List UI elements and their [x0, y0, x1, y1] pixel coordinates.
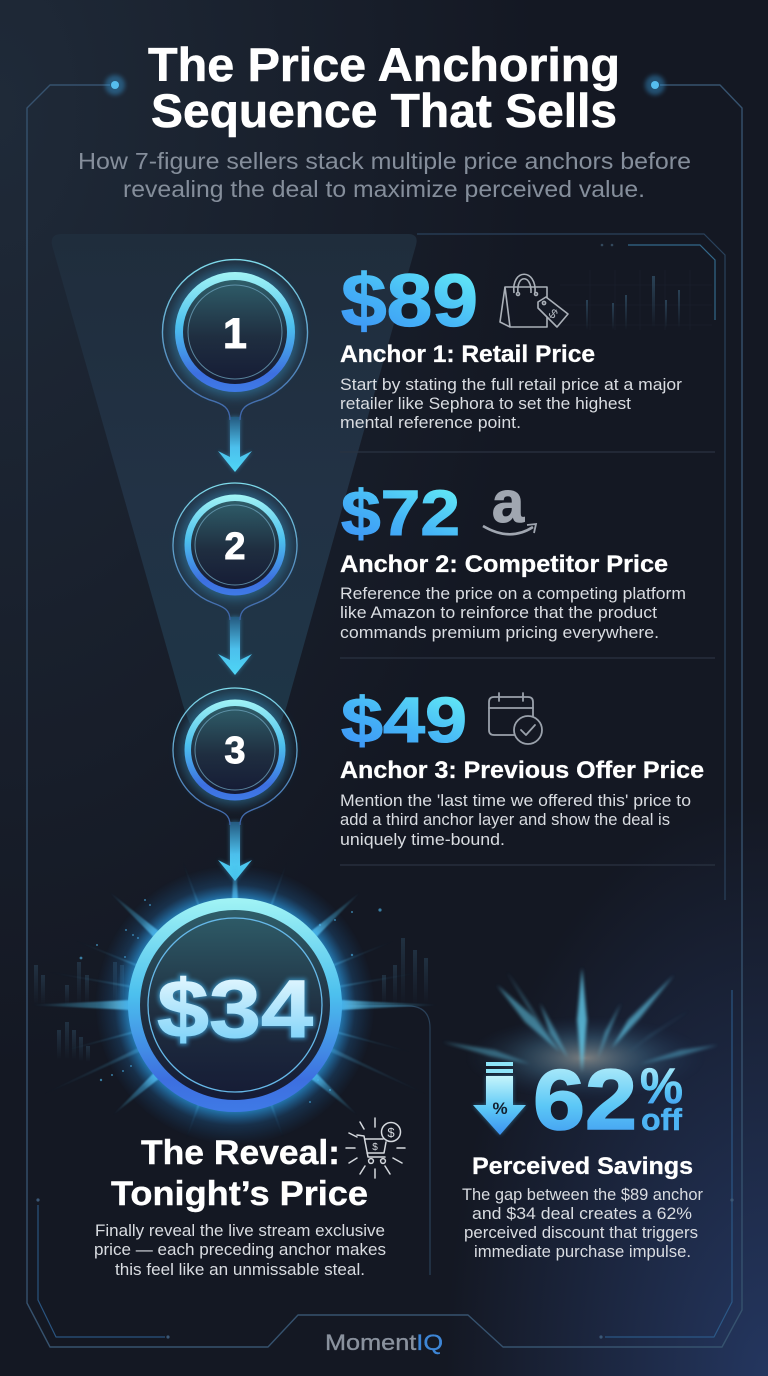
heading	[111, 1134, 368, 1213]
discount 62: 62	[533, 1053, 637, 1148]
reveal block	[94, 1118, 405, 1279]
description: Start by stating the full retail price at a major	[340, 376, 683, 394]
logo: Moment IQ	[325, 1330, 443, 1355]
funnel backdrop	[52, 234, 417, 760]
connector line	[345, 1006, 430, 1275]
reveal price circle	[95, 865, 375, 1145]
description: mental reference point.	[340, 414, 521, 432]
description: Reference the price on a competing platform	[340, 585, 686, 603]
title: Sequence That Sells	[151, 84, 617, 137]
subtitle: How 7-figure sellers stack multiple price anchors before	[78, 148, 691, 174]
arrow 2 to 3	[218, 617, 252, 675]
step 2 node	[173, 483, 297, 620]
description: perceived discount that triggers	[464, 1224, 698, 1242]
description: Finally reveal the live stream exclusive	[95, 1222, 385, 1240]
description: immediate purchase impulse.	[474, 1243, 691, 1261]
icon: cart with coin: $	[372, 1142, 378, 1153]
description: price — each preceding anchor makes	[94, 1241, 386, 1259]
subtitle	[78, 148, 691, 202]
anchor 3 block	[340, 684, 704, 849]
icon: down arrow with percent	[473, 1062, 526, 1135]
description	[340, 792, 691, 849]
heading: Anchor 3: Previous Offer Price	[340, 757, 704, 784]
title: The Price Anchoring	[148, 38, 620, 91]
description: The gap between the $89 anchor	[462, 1186, 703, 1204]
icon: shopping bag with tag: $	[546, 306, 561, 322]
step 3 node	[173, 688, 297, 825]
step 1 node	[163, 260, 308, 420]
description: add a third anchor layer and show the deal is	[340, 811, 670, 829]
price 49: $49	[341, 684, 467, 756]
description	[340, 585, 686, 642]
icon: down arrow with percent: %	[492, 1099, 508, 1118]
off label: off	[641, 1102, 683, 1137]
panel outline with faint chart	[417, 234, 725, 900]
heading: Perceived Savings	[472, 1153, 693, 1180]
icon: amazon a with smile: a	[492, 470, 525, 535]
anchor 2 block	[340, 470, 686, 642]
step 1 node: 1	[223, 310, 247, 358]
description: like Amazon to reinforce that the product	[340, 604, 657, 622]
icon: amazon a with smile	[483, 470, 536, 535]
description	[94, 1222, 386, 1279]
heading: Anchor 1: Retail Price	[340, 341, 595, 368]
description: commands premium pricing everywhere.	[340, 624, 659, 642]
description: Mention the 'last time we offered this' price to	[340, 792, 691, 810]
icon: shopping bag with tag	[500, 274, 568, 327]
description	[462, 1186, 703, 1261]
savings burst	[443, 968, 718, 1100]
arrow 1 to 2	[218, 417, 252, 472]
description	[340, 376, 683, 432]
reveal burst rays	[30, 845, 440, 1142]
heading: Anchor 2: Competitor Price	[340, 551, 668, 578]
arrow 3 to reveal	[218, 822, 252, 881]
reveal price circle: $34	[157, 964, 313, 1055]
anchor 1 block	[340, 259, 683, 432]
step 2 node: 2	[224, 526, 246, 568]
step 3 node: 3	[224, 730, 246, 772]
icon: cart with coin: $	[387, 1125, 395, 1140]
description: and $34 deal creates a 62%	[472, 1205, 692, 1223]
description: uniquely time-bound.	[340, 831, 505, 849]
description: this feel like an unmissable steal.	[115, 1261, 365, 1279]
heading: Tonight’s Price	[111, 1175, 368, 1213]
savings block	[462, 1053, 703, 1261]
title	[148, 38, 620, 137]
subtitle: revealing the deal to maximize perceived value.	[123, 176, 645, 202]
icon: cart with coin	[346, 1118, 405, 1178]
reveal price circle: $34	[157, 964, 313, 1055]
description: retailer like Sephora to set the highest	[340, 395, 631, 413]
reveal faint charts and dots	[34, 899, 428, 1103]
price 89: $89	[341, 259, 478, 342]
percent sign: %	[640, 1058, 683, 1114]
icon: calendar with check	[489, 693, 542, 744]
heading: The Reveal:	[141, 1134, 340, 1172]
price 72: $72	[341, 477, 460, 549]
